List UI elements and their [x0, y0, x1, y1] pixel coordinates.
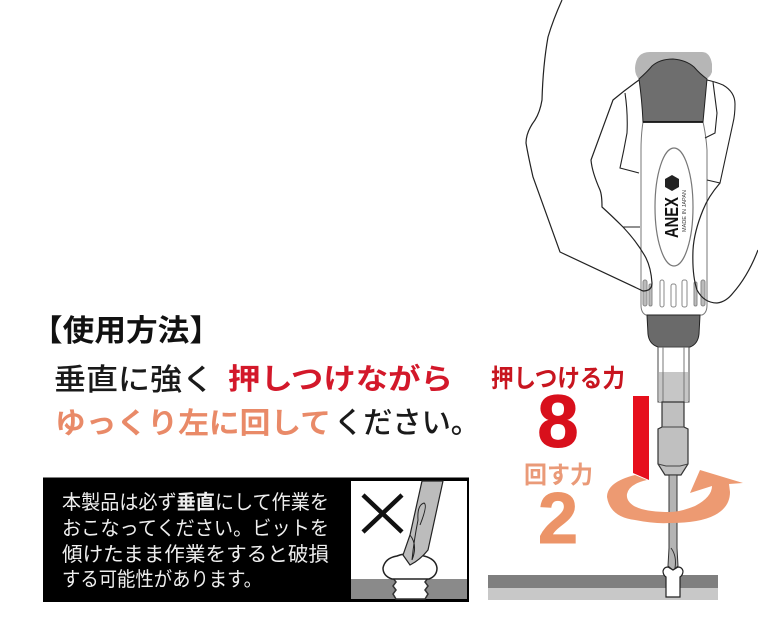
illustration: screwdriver held in hand: [526, 0, 758, 570]
bit shaft: [668, 475, 678, 570]
screwdriver cap: [635, 52, 712, 80]
hand: fingers right: [705, 80, 735, 183]
screwdriver grip top: [639, 59, 707, 122]
bit holder: [658, 402, 688, 475]
instruction text: 垂直に強く: [54, 364, 214, 397]
hand: fingers left: [620, 93, 640, 227]
work surface: [488, 575, 718, 600]
instruction text: [54, 362, 480, 440]
pressing force label: 押しつける力: [491, 365, 625, 393]
hex shank: [658, 347, 689, 402]
collar: [647, 315, 700, 347]
number 2: 2: [538, 479, 578, 559]
Anex logo: [662, 175, 688, 238]
warning text: [62, 491, 329, 591]
hand: palm and finger: [526, 0, 652, 291]
warning text: おこなってください。ビットを: [62, 517, 329, 540]
screwdriver handle body: [641, 122, 707, 315]
handle logo oval: [655, 148, 693, 266]
instruction text: ゆっくり左に回して: [55, 407, 331, 440]
warning illustration: tilted bit on screw: [351, 481, 467, 599]
warning text: 傾けたまま作業をすると破損: [62, 543, 329, 566]
instruction text: 押しつけながら: [228, 362, 453, 396]
hand: thumb: [693, 183, 758, 303]
turning force label: 回す力: [524, 462, 593, 489]
warning text: 本製品は必ず垂直にして作業を: [62, 491, 329, 514]
warning text: する可能性があります。: [62, 568, 262, 591]
instruction text: ください。: [334, 407, 480, 440]
number 8: 8: [537, 380, 579, 463]
rotation arrow: [607, 470, 743, 523]
Anex logo: ANEX: [662, 197, 682, 238]
Anex logo: MADE IN JAPAN: [682, 190, 688, 232]
red force arrow: [633, 396, 649, 480]
handle ribs: [643, 280, 705, 307]
screw in surface: [663, 567, 683, 597]
warning panel: [43, 478, 469, 602]
heading: 【使用方法】: [31, 315, 221, 348]
